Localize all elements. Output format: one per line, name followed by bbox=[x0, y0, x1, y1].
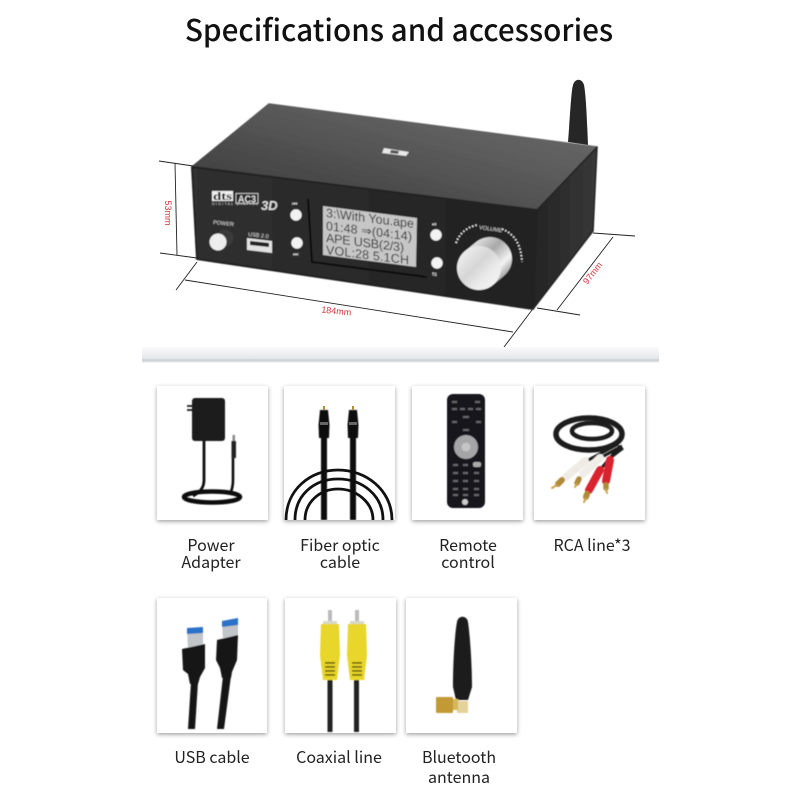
card: fiber optic cable bbox=[284, 386, 395, 520]
card: power adapter bbox=[157, 386, 268, 520]
LCD screen: 01:48 ⇒(04:14) bbox=[326, 219, 412, 244]
logos: dts AC3 3D bbox=[212, 189, 278, 213]
volume knob bbox=[457, 246, 501, 290]
card: remote control bbox=[412, 386, 523, 520]
icon: fiber optic cable bbox=[286, 406, 392, 520]
top badge bbox=[382, 148, 409, 156]
label: VOLUME: VOLUME bbox=[479, 225, 503, 234]
label: POWER: POWER bbox=[213, 220, 234, 228]
title: Specifications and accessories bbox=[185, 7, 613, 50]
label: Power Adapter: Adapter bbox=[181, 549, 241, 573]
device top face bbox=[192, 104, 597, 210]
LCD screen: 3:\With You.ape bbox=[326, 206, 414, 231]
card: bluetooth antenna bbox=[406, 598, 517, 733]
label: 97mm: 97mm bbox=[581, 260, 604, 286]
front buttons bbox=[290, 209, 443, 269]
label: Coaxial line: Coaxial line bbox=[296, 744, 382, 768]
label: Fiber optic cable: cable bbox=[320, 549, 360, 573]
label: USB 2.0: USB 2.0 bbox=[248, 232, 269, 240]
button glyphs: ⏯ bbox=[432, 221, 437, 228]
label: 53mm: 53mm bbox=[163, 200, 173, 226]
icon: RCA cable bbox=[552, 418, 623, 502]
device right side bbox=[533, 147, 597, 309]
label: Fiber optic cable: Fiber optic bbox=[300, 532, 380, 556]
icon: USB cables bbox=[182, 618, 238, 729]
logos: dts AC3 3D: AC3 bbox=[238, 194, 256, 206]
LCD screen: APE USB(2/3) bbox=[326, 231, 404, 255]
LCD screen: VOL:28 5.1CH bbox=[326, 243, 409, 267]
icon: antenna bbox=[436, 617, 472, 713]
label: Remote control: Remote bbox=[439, 532, 497, 556]
label: USB cable: USB cable bbox=[174, 744, 250, 768]
dimension lines bbox=[159, 161, 635, 347]
button glyphs: ⏮ bbox=[292, 201, 298, 208]
card: RCA line bbox=[534, 386, 645, 520]
label: Remote control: control bbox=[441, 549, 495, 573]
label: Power Adapter: Power bbox=[187, 532, 235, 556]
button glyphs: ⇆ bbox=[432, 271, 437, 278]
display recess bbox=[308, 199, 427, 277]
icon: bluetooth antenna on device bbox=[568, 80, 588, 145]
divider band bbox=[142, 347, 659, 363]
logos: dts AC3 3D: DIGITAL DIGITAL bbox=[212, 202, 258, 206]
label: RCA line*3: RCA line*3 bbox=[554, 532, 630, 556]
icon: remote control bbox=[447, 394, 485, 508]
volume scale dots bbox=[456, 225, 522, 262]
device body bbox=[192, 104, 597, 309]
button glyphs bbox=[292, 201, 437, 278]
label: 184mm: 184mm bbox=[321, 304, 352, 318]
label: Bluetooth antenna: Bluetooth bbox=[422, 744, 496, 768]
USB port bbox=[247, 238, 272, 253]
card: USB cable bbox=[157, 598, 267, 733]
logos: dts AC3 3D: 3D bbox=[261, 198, 278, 213]
button glyphs: ⏭ bbox=[293, 251, 299, 258]
logos: dts AC3 3D: dts bbox=[213, 189, 232, 203]
LCD screen bbox=[323, 206, 417, 267]
icon: coaxial cables bbox=[320, 610, 367, 732]
icon: power adapter bbox=[184, 398, 240, 502]
power knob bbox=[210, 230, 234, 250]
card: coaxial line bbox=[285, 598, 396, 733]
device dimension diagram bbox=[159, 80, 635, 347]
device front panel bbox=[192, 167, 537, 309]
label: Bluetooth antenna: antenna bbox=[428, 764, 490, 788]
